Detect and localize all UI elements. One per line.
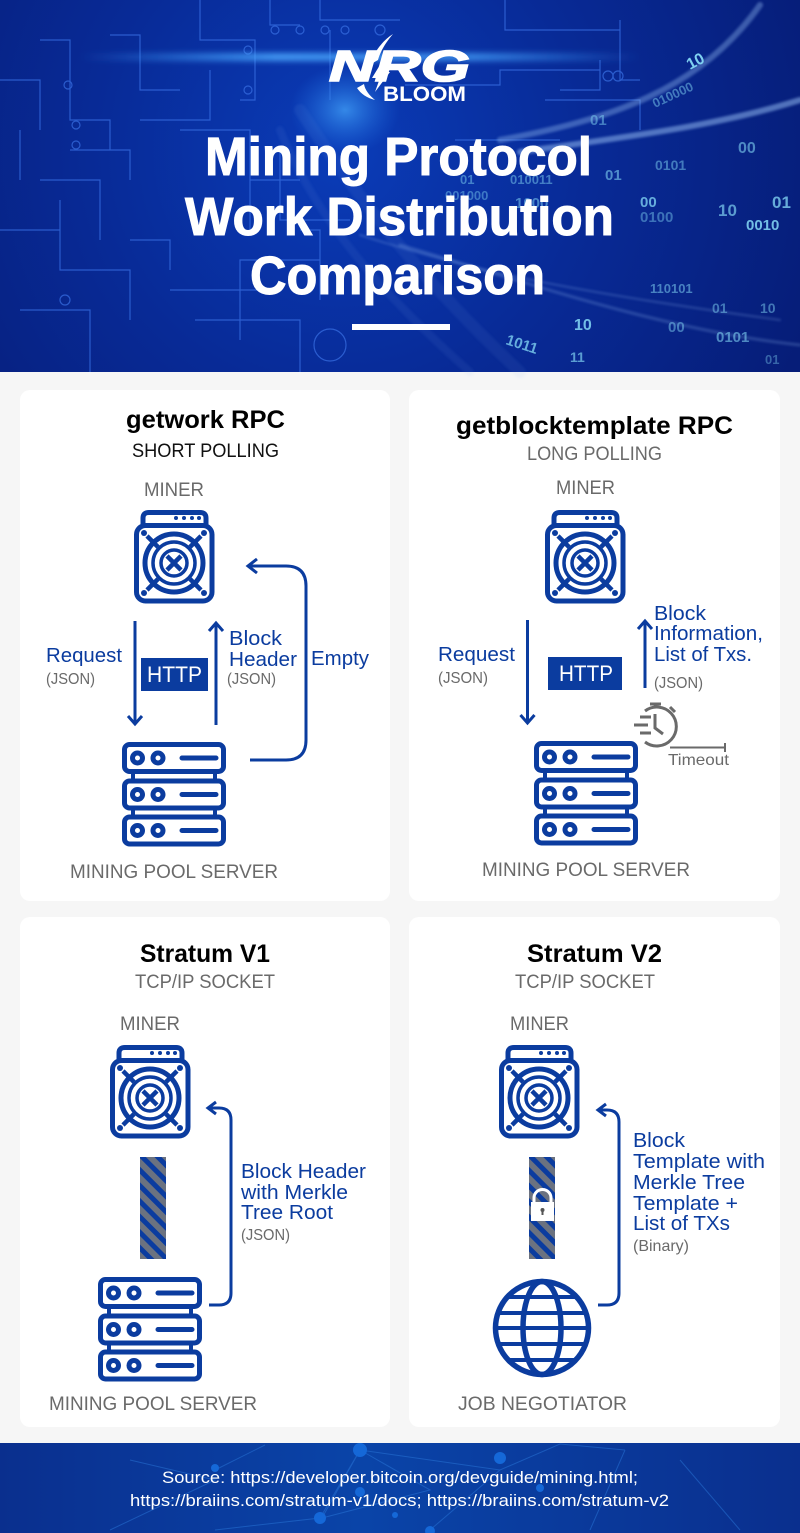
- label: job negotiator: JOB NEGOTIATOR: [458, 1394, 627, 1415]
- subheading: short polling: SHORT POLLING: [132, 441, 279, 462]
- binary digits: 1011: [504, 332, 540, 358]
- binary digits: 0100: [640, 209, 673, 226]
- title: Comparison: [250, 246, 545, 306]
- icon: globe: [495, 1282, 589, 1374]
- label: request: [46, 645, 122, 688]
- binary digits: 10: [574, 317, 592, 334]
- label: miner: MINER: [144, 480, 204, 501]
- binary digits: 01: [765, 352, 779, 367]
- logo: [329, 34, 470, 106]
- label: request: Request: [46, 645, 122, 667]
- logo: NRG: [329, 42, 470, 91]
- heading: getblocktemplate RPC: getblocktemplate RPC: [456, 412, 733, 440]
- title underline: [352, 324, 450, 330]
- label: mining pool server: MINING POOL SERVER: [482, 860, 690, 881]
- subheading: TCP/IP socket: TCP/IP SOCKET: [515, 972, 655, 993]
- label: block template with merkle tree template: Template +: [633, 1193, 738, 1215]
- label: request: (JSON): [438, 670, 488, 687]
- label: block header with merkle tree root: with Merkle: [240, 1182, 348, 1204]
- label: miner: MINER: [556, 478, 615, 499]
- binary digits: 01: [460, 172, 474, 187]
- label: block template with merkle tree template: Template with: [633, 1151, 765, 1173]
- badge: HTTP: HTTP: [147, 662, 202, 687]
- label: request: [438, 644, 515, 687]
- label: block template with merkle tree template: [633, 1130, 765, 1255]
- icon: stopwatch: [634, 704, 676, 746]
- label: block information: Information,: [654, 623, 763, 645]
- binary digits: 010011: [510, 172, 553, 187]
- icon: miner: [502, 1048, 577, 1136]
- binary digits: 01: [772, 193, 791, 212]
- icon: miner: [136, 512, 212, 601]
- binary digits: 0010: [746, 217, 779, 234]
- arrow: empty: [248, 559, 306, 760]
- socket bar: [529, 1157, 555, 1259]
- label: empty: Empty: [311, 648, 369, 670]
- label: block template with merkle tree template: (Binary): [633, 1238, 689, 1255]
- label: block header with merkle tree root: Tree Root: [241, 1202, 333, 1224]
- header banner: [0, 0, 800, 372]
- glow flare: [290, 65, 400, 155]
- binary digits: 00: [738, 140, 756, 157]
- label: mining pool server: MINING POOL SERVER: [49, 1394, 257, 1415]
- label: block header with merkle tree root: [240, 1161, 366, 1244]
- label: block header: Block: [229, 628, 283, 650]
- icon: miner: [548, 512, 623, 601]
- title: Mining Protocol: [205, 127, 592, 187]
- label: timeout: Timeout: [668, 752, 730, 769]
- subheading: long polling: LONG POLLING: [527, 444, 662, 465]
- label: miner: MINER: [120, 1014, 180, 1035]
- title: Work Distribution: [185, 187, 614, 247]
- binary digits: 10: [718, 201, 737, 220]
- binary digits: 001000: [445, 188, 488, 203]
- label: block header with merkle tree root: Block Header: [241, 1161, 366, 1183]
- label: block information: List of Txs.: [654, 644, 752, 666]
- title: [185, 127, 614, 306]
- label: block template with merkle tree template: List of TXs: [633, 1213, 730, 1235]
- panel: getwork RPC: [20, 390, 390, 901]
- arrow: request: [128, 621, 142, 724]
- arrow: block information: [638, 621, 652, 688]
- label: block template with merkle tree template: Merkle Tree: [633, 1172, 745, 1194]
- logo: BLOOM: [383, 83, 466, 106]
- label: block header: [227, 628, 297, 688]
- binary digits: 10: [684, 50, 708, 74]
- subheading: TCP/IP socket: TCP/IP SOCKET: [135, 972, 275, 993]
- binary digits: 0101: [655, 157, 686, 173]
- socket bar: [140, 1157, 166, 1259]
- binary digits: 01: [712, 300, 728, 316]
- binary digits: 00: [640, 194, 657, 211]
- label: miner: MINER: [510, 1014, 569, 1035]
- icon: miner: [112, 1048, 188, 1136]
- arrow: request: [520, 620, 534, 723]
- label: block information: [654, 603, 763, 692]
- footer banner: [0, 1443, 800, 1533]
- source text: https://braiins.com/stratum-v1/docs; https://braiins.com/stratum-v2: [130, 1491, 669, 1510]
- binary digits: 1000: [515, 195, 548, 212]
- icon: server: [536, 744, 636, 843]
- icon: lock: [531, 1190, 554, 1221]
- arrow: block header: [208, 1102, 231, 1305]
- binary digits: 10: [760, 300, 776, 316]
- badge: HTTP: [141, 658, 208, 691]
- label: block header with merkle tree root: (JSON): [241, 1227, 290, 1244]
- binary digits: [445, 50, 791, 367]
- label: block information: (JSON): [654, 675, 703, 692]
- binary digits: 00: [668, 319, 685, 336]
- heading: Stratum V2: Stratum V2: [527, 940, 662, 968]
- badge: HTTP: HTTP: [559, 661, 613, 686]
- arrow: block template: [598, 1104, 619, 1305]
- heading: Stratum V1: Stratum V1: [140, 940, 270, 968]
- badge: HTTP: [548, 657, 622, 690]
- arrow: block header: [209, 623, 223, 725]
- label: block header: Header: [229, 649, 297, 671]
- icon: server: [124, 744, 224, 844]
- panel: getblocktemplate RPC: [409, 390, 780, 901]
- source text: Source: https://developer.bitcoin.org/devguide/mining.html;: [162, 1468, 638, 1487]
- timeout bar: [670, 743, 725, 752]
- binary digits: 110101: [650, 281, 693, 296]
- binary digits: 0101: [716, 329, 749, 346]
- binary digits: 010000: [650, 79, 696, 111]
- label: block template with merkle tree template: Block: [633, 1130, 686, 1152]
- binary digits: 11: [570, 349, 585, 365]
- binary digits: 01: [590, 112, 607, 129]
- label: block header: (JSON): [227, 671, 276, 688]
- label: request: (JSON): [46, 671, 95, 688]
- panel: Stratum V2: [409, 917, 780, 1427]
- source text: [130, 1468, 669, 1510]
- label: request: Request: [438, 644, 515, 666]
- binary digits: 01: [605, 167, 622, 184]
- label: block information: Block: [654, 603, 707, 625]
- heading: getwork RPC: getwork RPC: [126, 406, 285, 434]
- panel: Stratum V1: [20, 917, 390, 1427]
- label: mining pool server: MINING POOL SERVER: [70, 862, 278, 883]
- icon: server: [100, 1280, 200, 1379]
